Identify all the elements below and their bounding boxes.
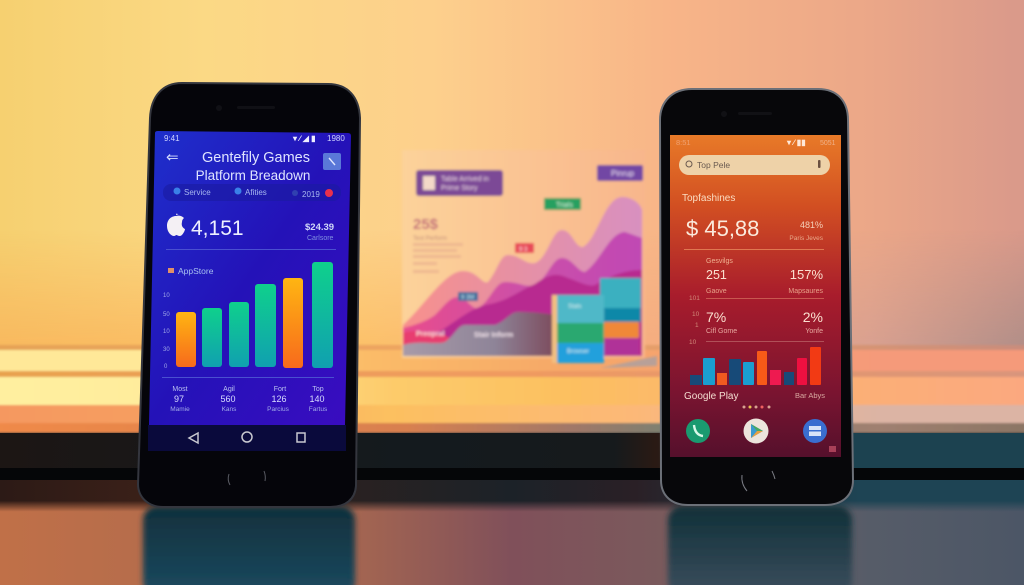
- stat: revenue: Carlsore: [307, 235, 334, 242]
- labels: Bar Abys: [795, 391, 825, 400]
- stats row: Most: [172, 386, 188, 393]
- stat: 45%: Paris Jeves: [789, 235, 824, 242]
- stats row 2: 1: [695, 322, 699, 329]
- axis labels: 10: [163, 329, 170, 335]
- stat: apple 4,151: 4,151: [191, 217, 244, 240]
- stat: $45,88: $ 45,88: [686, 216, 759, 241]
- stats row: Mamie: [170, 406, 190, 413]
- callout: purple top-right: Pinrup: [611, 169, 635, 178]
- filter row: Afities: [245, 188, 267, 197]
- stat: 25% text block: [413, 216, 463, 273]
- divider: [706, 341, 824, 342]
- title: [196, 150, 310, 183]
- stats row: 126: [271, 394, 287, 404]
- status bar: 5051: [820, 140, 836, 147]
- stats row 2: Yonfe: [805, 328, 823, 335]
- stat: revenue: $24.39: [305, 222, 334, 233]
- axis labels: 10: [163, 293, 170, 299]
- earpiece: [216, 105, 275, 111]
- stat: 45%: [789, 220, 824, 242]
- callout: red tag: [515, 243, 534, 253]
- axis labels: [163, 293, 170, 370]
- stats row: Top: [312, 386, 324, 393]
- title: Gentefily Games: [202, 150, 310, 166]
- stats row 1: Gaove: [706, 288, 727, 295]
- stats row: Parcius: [267, 406, 290, 413]
- area labels: Preopral: [416, 331, 444, 338]
- icon: apple: [167, 214, 185, 236]
- bar chart: App Store: [163, 262, 333, 370]
- callout: green tag: Trials: [556, 202, 573, 209]
- stats row 1: Gesvilgs: [706, 258, 733, 265]
- callout: purple top-left: Table Arrived in: [441, 176, 489, 183]
- status bar: ▾ ∕ ▮▮: [786, 138, 806, 147]
- stats row 2: 101: [689, 295, 700, 302]
- stats row: 97: [174, 394, 184, 404]
- nav band: [148, 425, 346, 451]
- status bar: ▾ ∕ ◢ ▮: [292, 134, 316, 143]
- table edge: [0, 433, 1024, 470]
- stats row: Kans: [222, 406, 237, 413]
- stats row 1: 157%: [790, 267, 823, 282]
- stats row 1: 251: [706, 268, 727, 282]
- page dots: [742, 406, 770, 408]
- status bar: 1980: [327, 134, 345, 143]
- home button: [228, 471, 265, 485]
- stats row 2: 7%: [706, 309, 726, 325]
- axis labels: 0: [164, 364, 168, 370]
- stats row 1: [706, 258, 823, 295]
- stat: 25% text block: 25$: [413, 216, 439, 233]
- home button: [742, 471, 775, 491]
- stat: revenue: [305, 222, 334, 242]
- status bar: [164, 134, 345, 143]
- status bar: 9:41: [164, 134, 180, 143]
- stat: 25% text block: Test Perform: [413, 236, 447, 242]
- title: Platform Breadown: [196, 168, 310, 183]
- labels: [684, 391, 825, 402]
- axis labels: 50: [163, 312, 170, 318]
- stacked cards: Browser: [567, 349, 589, 355]
- stats row 2: Cifl Gome: [706, 328, 737, 335]
- filter row: [163, 184, 341, 201]
- screen: [149, 131, 351, 425]
- chart: layered area chart: [403, 197, 642, 356]
- stacked cards: [552, 278, 641, 363]
- divider: [166, 249, 336, 250]
- callout: purple top-right: [597, 165, 643, 181]
- labels: Google Play: [684, 391, 738, 402]
- stats row: Fartus: [309, 406, 328, 413]
- small badge: [829, 446, 836, 452]
- icon: phone: [686, 419, 710, 443]
- icon: calendar app: [803, 419, 827, 443]
- callout: blue tag: [458, 292, 478, 301]
- callout: green tag: [544, 198, 581, 210]
- status bar: [676, 138, 836, 147]
- nav bar icons: [189, 432, 305, 443]
- phone body: [138, 83, 360, 507]
- earpiece: [721, 111, 772, 117]
- stats row 2: 2%: [803, 309, 823, 325]
- stat: apple 4,151: [167, 214, 244, 240]
- area labels: [416, 331, 513, 339]
- divider: [706, 298, 824, 299]
- divider: [162, 377, 334, 378]
- stats row: Fort: [274, 386, 286, 393]
- status bar: 8:51: [676, 138, 691, 147]
- panel: background area chart card: [402, 150, 657, 368]
- search bar: Top Pele: [697, 160, 730, 170]
- divider: [684, 249, 824, 250]
- stats row 1: Mapsaures: [788, 288, 823, 295]
- legend: AppStore: AppStore: [178, 266, 214, 276]
- back arrow: ⇐: [166, 149, 179, 166]
- filter row: 2019: [302, 190, 320, 199]
- area labels: Stair Inform: [474, 332, 513, 339]
- phone body: [660, 89, 853, 505]
- stats row 2: [689, 295, 823, 346]
- stat: 45%: 481%: [800, 220, 823, 230]
- stats row: 140: [309, 394, 325, 404]
- phone: left, blue screen: [138, 83, 360, 507]
- stats row 2: 10: [689, 339, 697, 346]
- reflective floor: [0, 468, 1024, 585]
- bar chart: Google Play: [690, 347, 821, 385]
- callout: purple top-left: [416, 170, 503, 196]
- shelf surface: [0, 345, 1024, 433]
- stats row: [170, 386, 328, 413]
- callout: blue tag: 9 3M: [461, 295, 474, 301]
- icon: play store: [744, 418, 768, 444]
- background wall: [0, 0, 1024, 350]
- callout: purple top-left: Prime Story: [441, 185, 478, 192]
- stats row: 560: [220, 394, 236, 404]
- stacked cards: Stats: [568, 304, 582, 310]
- phone: right, red screen: [660, 89, 853, 505]
- search bar: [679, 155, 830, 175]
- callout: red tag: 9 3: [519, 247, 528, 253]
- heading: Topfashines: [682, 193, 735, 204]
- stats row 2: 10: [692, 311, 700, 318]
- screen: [670, 135, 841, 457]
- axis labels: 30: [163, 347, 170, 353]
- search button: [323, 153, 341, 170]
- filter row: Service: [184, 188, 211, 197]
- stats row: Agil: [223, 386, 235, 393]
